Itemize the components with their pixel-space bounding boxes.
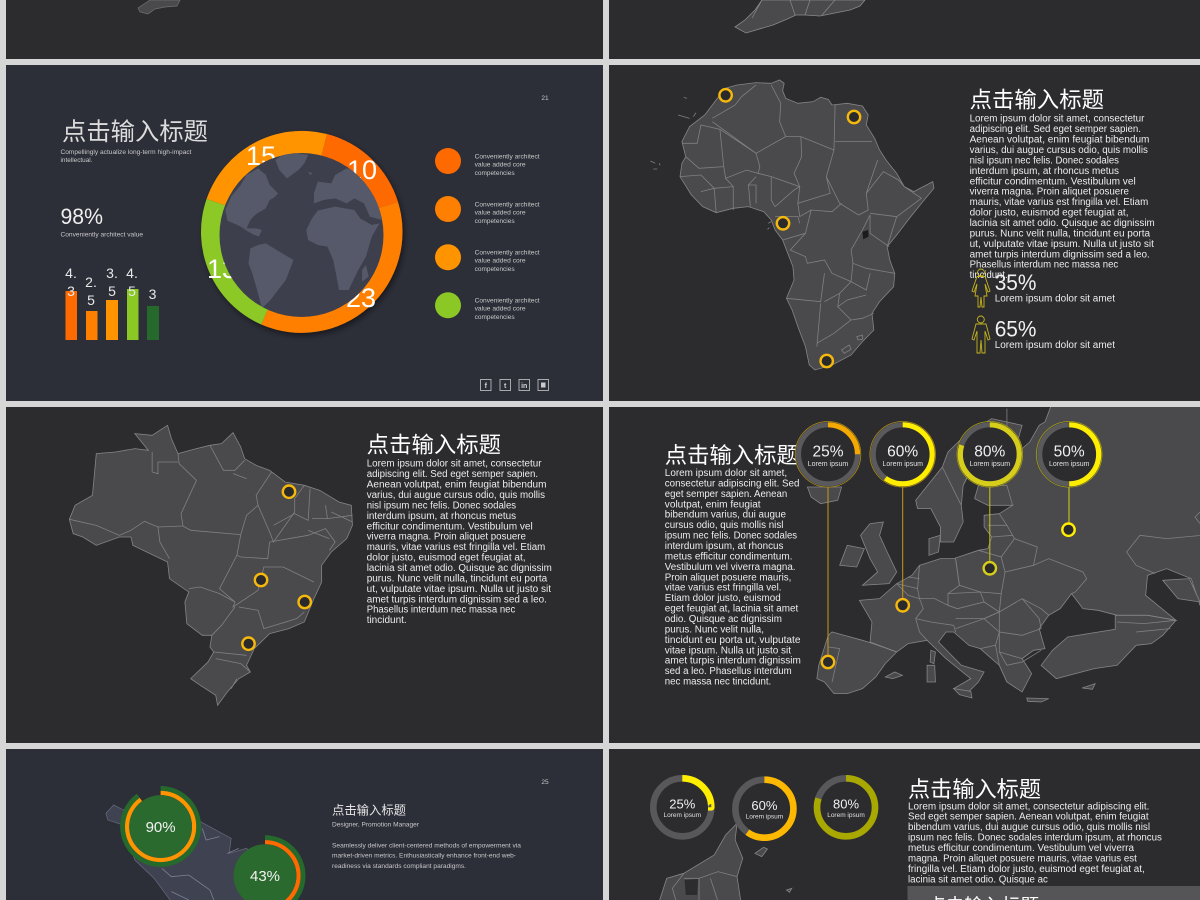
body text: [970, 114, 1155, 281]
body text: Aenean volutpat, enim feugiat bibendum: [367, 480, 546, 491]
legend: competencies: [475, 266, 515, 273]
heading: 点击输入标题: [970, 82, 1104, 114]
bar chart: [65, 265, 159, 340]
legend: Conveniently architect: [475, 298, 540, 305]
panel: Japan map slide: [609, 749, 1200, 900]
callout: 25%: Lorem ipsum: [808, 461, 848, 468]
ring: 60%: [735, 780, 793, 838]
callout: 60%: Lorem ipsum: [882, 461, 923, 468]
icon: man: [972, 316, 990, 353]
social icons: t: [504, 383, 507, 390]
panel: South America percent slide: [6, 749, 603, 900]
body text: metus efficitur condimentum.: [665, 551, 792, 562]
body text: Phasellus interdum nec massa nec: [970, 260, 1118, 271]
heading: 点击输入标题: [908, 772, 1041, 804]
world map continents: [225, 152, 382, 308]
callout box: [908, 886, 1200, 900]
body text: mauris, vitae varius est fringilla vel. Etiam: [367, 542, 545, 553]
body text: Lorem ipsum dolor sit amet,: [665, 468, 787, 479]
donut chart with globe: 13: [207, 254, 237, 284]
body text: Lorem ipsum dolor sit amet, consectetur adipiscing elit.: [908, 801, 1149, 812]
ring: 80%: Lorem ipsum: [827, 812, 865, 819]
body text: ut, vulputate vitae ipsum. Nulla ut justo sit: [367, 584, 551, 595]
body text: magna. Proin aliquet posuere mauris, vitae varius est: [908, 854, 1137, 864]
body text: eget feugiat at, lacinia sit amet: [665, 604, 798, 615]
ring: 80%: [817, 778, 875, 836]
stat 35%: Lorem ipsum dolor sit amet: [995, 294, 1115, 305]
stat 35%: [995, 270, 1115, 305]
body text: fringilla vel. Etiam dolor justo, euismod eget feugiat at,: [908, 864, 1145, 875]
body text: adipiscing elit. Sed eget semper sapien.: [970, 124, 1141, 135]
stat 65%: Lorem ipsum dolor sit amet: [995, 340, 1115, 351]
body text: purus. Nunc velit nulla, tincidunt eu porta: [367, 573, 548, 584]
title: 点击输入标题: [62, 113, 208, 148]
body text: interdum ipsum, at rhoncus metus: [970, 166, 1119, 177]
body text: vitae varius est fringilla vel.: [665, 583, 782, 594]
ring: 60%: Lorem ipsum: [746, 814, 783, 820]
bar chart: 4.: [65, 265, 77, 281]
paragraph: Seamlessly deliver client-centered methods of empowerment via: [332, 842, 521, 850]
body text: ut, vulputate vitae ipsum. Nulla ut justo sit: [970, 239, 1154, 250]
legend: value added core: [475, 258, 526, 265]
map: Brazil: [69, 425, 352, 705]
body text: [367, 459, 552, 626]
map: Africa: [650, 80, 934, 370]
panel: Brazil map slide: [6, 407, 603, 743]
subtitle: Compellingly actualize long-term high-impact: [60, 149, 192, 156]
body text: lacinia sit amet odio. Quisque ac dignissim: [970, 218, 1155, 229]
body text: eget semper sapien. Aenean: [665, 489, 787, 500]
paragraph: [332, 842, 521, 870]
callout: 90%: [123, 788, 199, 864]
subheading: Designer, Promotion Manager: [332, 822, 420, 828]
body text: viverra magna. Proin aliquet posuere: [970, 187, 1129, 198]
callout: 43%: 43%: [250, 868, 280, 885]
callout: 50%: Lorem ipsum: [1049, 461, 1090, 468]
bar chart: 4.: [126, 265, 138, 281]
donut chart with globe: 23: [346, 283, 376, 313]
social icons: [480, 380, 548, 390]
callout: 80%: 80%: [974, 444, 1006, 460]
callout: 50%: [1036, 422, 1102, 536]
panel: top-left slide remnant: [6, 0, 603, 59]
bar chart: 3.: [106, 265, 118, 281]
legend: competencies: [475, 218, 515, 225]
body text: ipsum nec felis. Donec sodales interdum ipsum, at rhoncus: [908, 833, 1162, 844]
legend: competencies: [475, 170, 515, 177]
panel: globe donut slide: [6, 65, 603, 401]
body text: mauris, vitae varius est fringilla vel. Etiam: [970, 197, 1148, 208]
body text: nisl ipsum nec felis. Donec sodales: [970, 155, 1119, 166]
bar chart: 2.: [85, 274, 97, 290]
ring: 25%: 25%: [669, 796, 696, 812]
legend: competencies: [475, 314, 515, 321]
body text: bibendum varius, dui augue: [665, 510, 786, 521]
social icons: f: [485, 383, 488, 390]
body text: Phasellus interdum nec massa nec: [367, 605, 515, 616]
ring: 25%: [653, 778, 711, 836]
body text: volutpat, enim feugiat: [665, 499, 761, 510]
body text: vitae ipsum. Nulla ut justo sit: [665, 645, 791, 656]
panel: Europe map slide: [609, 402, 1200, 743]
body text: amet turpis interdum dignissim: [665, 656, 801, 667]
subtitle: intellectual.: [60, 157, 93, 164]
body text: odio. Quisque ac dignissim: [665, 614, 782, 625]
body text: interdum ipsum, at rhoncus: [665, 541, 783, 552]
bar chart: 5: [87, 292, 95, 308]
callout: 50%: 50%: [1054, 444, 1085, 460]
body text: tincidunt eu porta ut, vulputate: [665, 635, 801, 646]
body text: Vestibulum vel viverra magna.: [665, 562, 796, 573]
callout: 43%: [227, 838, 303, 900]
callout: 60%: [870, 422, 936, 612]
legend: Conveniently architect: [475, 250, 540, 257]
body text: purus. Nunc velit nulla, tincidunt eu porta: [970, 228, 1151, 239]
body text: [665, 468, 801, 688]
body text: sed a leo. Phasellus interdum: [665, 666, 792, 677]
body text: varius, dui augue cursus odio, quis mollis: [367, 490, 545, 501]
social icons: in: [521, 383, 527, 390]
ring: 25%: Lorem ipsum: [664, 812, 701, 819]
callout: 90%: 90%: [146, 819, 176, 836]
body text: tincidunt.: [367, 615, 407, 626]
heading: 点击输入标题: [367, 428, 501, 460]
body text: Proin aliquet posuere mauris,: [665, 572, 791, 583]
stat 35%: 35%: [995, 270, 1036, 295]
heading: 点击输入标题: [665, 438, 799, 470]
callout: 25%: 25%: [812, 444, 844, 460]
paragraph: readiness via standards compliant paradigms.: [332, 863, 466, 870]
body text: Lorem ipsum dolor sit amet, consectetur: [367, 459, 542, 470]
donut chart with globe: 15: [246, 141, 276, 171]
body text: amet turpis interdum dignissim sed a leo.: [970, 249, 1150, 260]
body text: purus. Nunc velit nulla,: [665, 624, 764, 635]
body text: consectetur adipiscing elit. Sed: [665, 478, 799, 489]
body text: efficitur condimentum. Vestibulum vel: [970, 176, 1136, 187]
paragraph: market-driven metrics. Enthusiastically enhance front-end web-: [332, 853, 516, 860]
bar chart: 3: [149, 286, 157, 302]
bar chart: 5: [128, 283, 136, 299]
map: Japan: [659, 823, 792, 900]
body text: Lorem ipsum dolor sit amet, consectetur: [970, 114, 1145, 125]
map markers: [242, 486, 311, 650]
body text: nec massa nec tincidunt.: [665, 677, 771, 688]
page number 25: 25: [541, 779, 549, 786]
panel: Africa map slide: [609, 65, 1200, 401]
panel: top-right slide remnant: [609, 0, 1200, 59]
body text: [908, 801, 1162, 885]
body text: bibendum varius, dui augue cursus odio, quis mollis nisl: [908, 822, 1150, 833]
body text: Sed eget semper sapien. Aenean volutpat, enim feugiat: [908, 812, 1149, 823]
callout: 25%: [795, 422, 861, 668]
donut chart with globe: 10: [347, 155, 377, 185]
map markers: [719, 89, 860, 367]
callout: 60%: 60%: [887, 444, 918, 460]
body text: cursus odio, quis mollis nisl: [665, 520, 783, 531]
body text: efficitur condimentum. Vestibulum vel: [367, 521, 533, 532]
body text: varius, dui augue cursus odio, quis mollis: [970, 145, 1148, 156]
body text: amet turpis interdum dignissim sed a leo.: [367, 594, 547, 605]
body text: lacinia sit amet odio. Quisque ac dignissim: [367, 563, 552, 574]
body text: adipiscing elit. Sed eget semper sapien.: [367, 469, 538, 480]
page number 21: 21: [541, 95, 549, 102]
callout: 80%: Lorem ipsum: [970, 461, 1010, 468]
legend: value added core: [475, 306, 526, 313]
legend: Conveniently architect: [475, 202, 540, 208]
body text: tincidunt.: [970, 270, 1008, 281]
body text: metus efficitur condimentum. Vestibulum vel viverra: [908, 843, 1134, 854]
callout: 80%: [957, 422, 1023, 574]
body text: viverra magna. Proin aliquet posuere: [367, 532, 526, 543]
stat 65%: 65%: [995, 316, 1036, 342]
stat 98%: 98%: [60, 204, 103, 229]
legend: value added core: [475, 210, 526, 216]
legend: [435, 148, 540, 321]
stat 98%: [60, 204, 143, 238]
body text: dolor justo, euismod eget feugiat at,: [970, 208, 1128, 219]
heading: 点击输入标题: [332, 800, 406, 818]
stat 65%: [995, 316, 1115, 351]
stat 98%: Conveniently architect value: [60, 232, 143, 238]
body text: Etiam dolor justo, euismod: [665, 593, 781, 604]
subtitle: [60, 149, 192, 164]
map: northern South America: [106, 805, 297, 900]
body text: ipsum nec felis. Donec sodales: [665, 531, 797, 542]
body text: dolor justo, euismod eget feugiat at,: [367, 553, 526, 564]
legend: value added core: [475, 162, 526, 168]
donut chart with globe: [201, 131, 403, 333]
body text: interdum ipsum, at rhoncus metus: [367, 511, 516, 522]
body text: Aenean volutpat, enim feugiat bibendum: [970, 135, 1149, 146]
legend: Conveniently architect: [475, 154, 540, 160]
bar chart: 3: [67, 283, 75, 299]
ring: 80%: 80%: [833, 796, 859, 812]
icon: woman: [972, 269, 990, 307]
bar chart: 5: [108, 283, 116, 299]
map: Europe: [807, 402, 1200, 702]
body text: lacinia sit amet odio. Quisque ac: [908, 874, 1048, 885]
ring: 60%: 60%: [751, 798, 778, 813]
body text: nisl ipsum nec felis. Donec sodales: [367, 500, 516, 511]
